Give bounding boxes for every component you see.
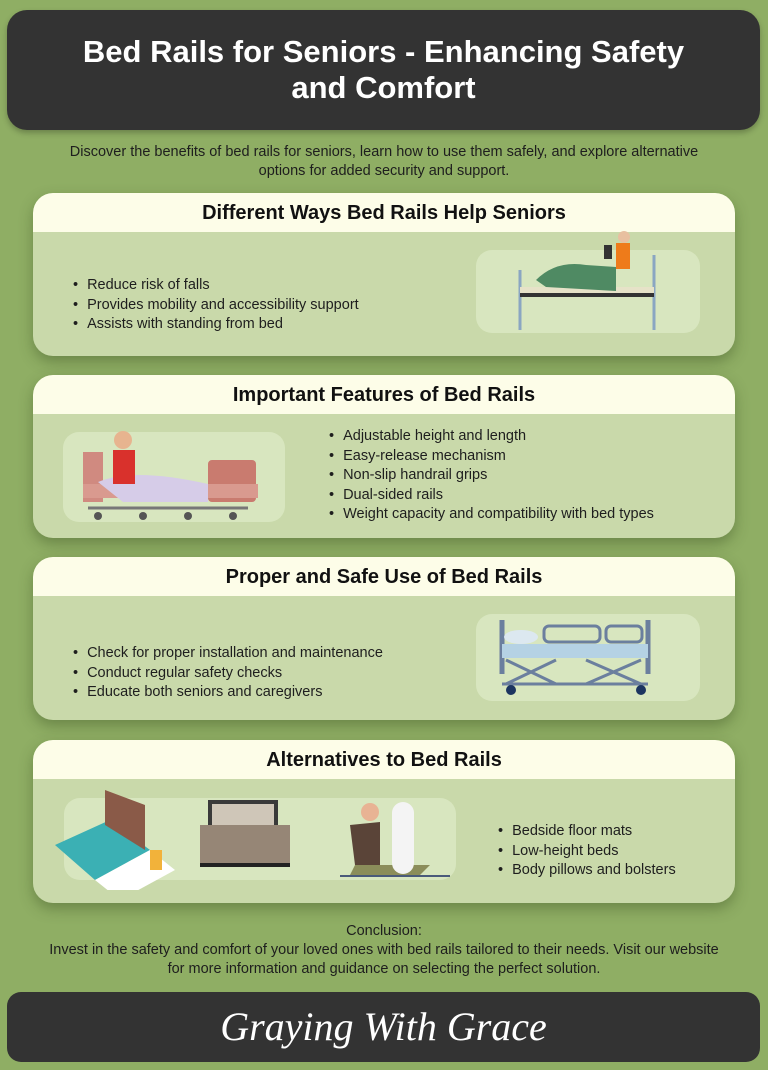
list: Reduce risk of falls: [87, 277, 210, 293]
panel: proper use: [33, 557, 735, 720]
list: Easy-release mechanism: [343, 448, 506, 464]
panel: important features: [33, 375, 735, 538]
heading: Different Ways Bed Rails Help Seniors: [202, 202, 566, 224]
heading: Important Features of Bed Rails: [233, 384, 535, 406]
list: Dual-sided rails: [343, 486, 443, 502]
heading: Alternatives to Bed Rails: [266, 749, 502, 771]
image: three alternatives: [64, 798, 456, 880]
title: and Comfort: [291, 70, 476, 105]
list: [74, 277, 359, 332]
conclusion: Invest in the safety and comfort of your loved ones with bed rails tailored to their needs. Visit our website for more information and guidance on selecting the perfect solution.: [49, 942, 719, 977]
list: Bedside floor mats: [512, 823, 632, 839]
heading: [33, 557, 735, 596]
heading: [33, 375, 735, 414]
footer brand: [7, 992, 760, 1062]
list: [330, 428, 654, 522]
image: senior in bed: [476, 250, 700, 333]
list: Check for proper installation and maintenance: [87, 645, 383, 661]
list: Low-height beds: [512, 842, 618, 858]
list: Provides mobility and accessibility support: [87, 296, 359, 312]
title: [7, 10, 760, 130]
footer brand: Graying With Grace: [220, 1004, 547, 1049]
conclusion: [49, 923, 719, 977]
intro text: Discover the benefits of bed rails for seniors, learn how to use them safely, and explore alternative options for added security and support.: [70, 144, 698, 179]
list: [498, 823, 676, 878]
image: hospital bed: [476, 614, 700, 701]
list: Non-slip handrail grips: [343, 467, 487, 483]
heading: [33, 193, 735, 232]
list: Weight capacity and compatibility with bed types: [343, 506, 654, 522]
conclusion: Conclusion:: [346, 923, 422, 939]
list: Educate both seniors and caregivers: [87, 684, 322, 700]
list: Conduct regular safety checks: [87, 664, 282, 680]
title: Bed Rails for Seniors - Enhancing Safety: [83, 34, 684, 69]
list: Adjustable height and length: [343, 428, 526, 444]
panel: different ways: [33, 193, 735, 356]
heading: [33, 740, 735, 779]
list: Body pillows and bolsters: [512, 862, 676, 878]
list: Assists with standing from bed: [87, 316, 283, 332]
panel: alternatives: [33, 740, 735, 903]
list: [74, 645, 383, 700]
image: patient in hospital bed: [63, 432, 285, 522]
heading: Proper and Safe Use of Bed Rails: [226, 566, 542, 588]
